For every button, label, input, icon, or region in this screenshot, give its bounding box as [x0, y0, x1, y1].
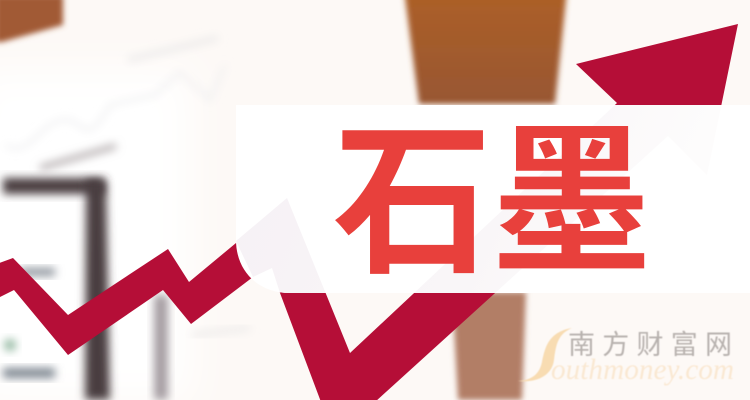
logo Chinese name: 南方财富网 — [568, 330, 732, 360]
logo swoosh S — [518, 328, 572, 381]
arrow ghost showing through banner — [236, 190, 530, 293]
title: graphite: 石墨 — [333, 111, 651, 295]
logo domain: outhmoney.com — [551, 353, 734, 386]
white title banner — [236, 105, 750, 293]
watermark: Southmoney logo — [518, 328, 734, 386]
